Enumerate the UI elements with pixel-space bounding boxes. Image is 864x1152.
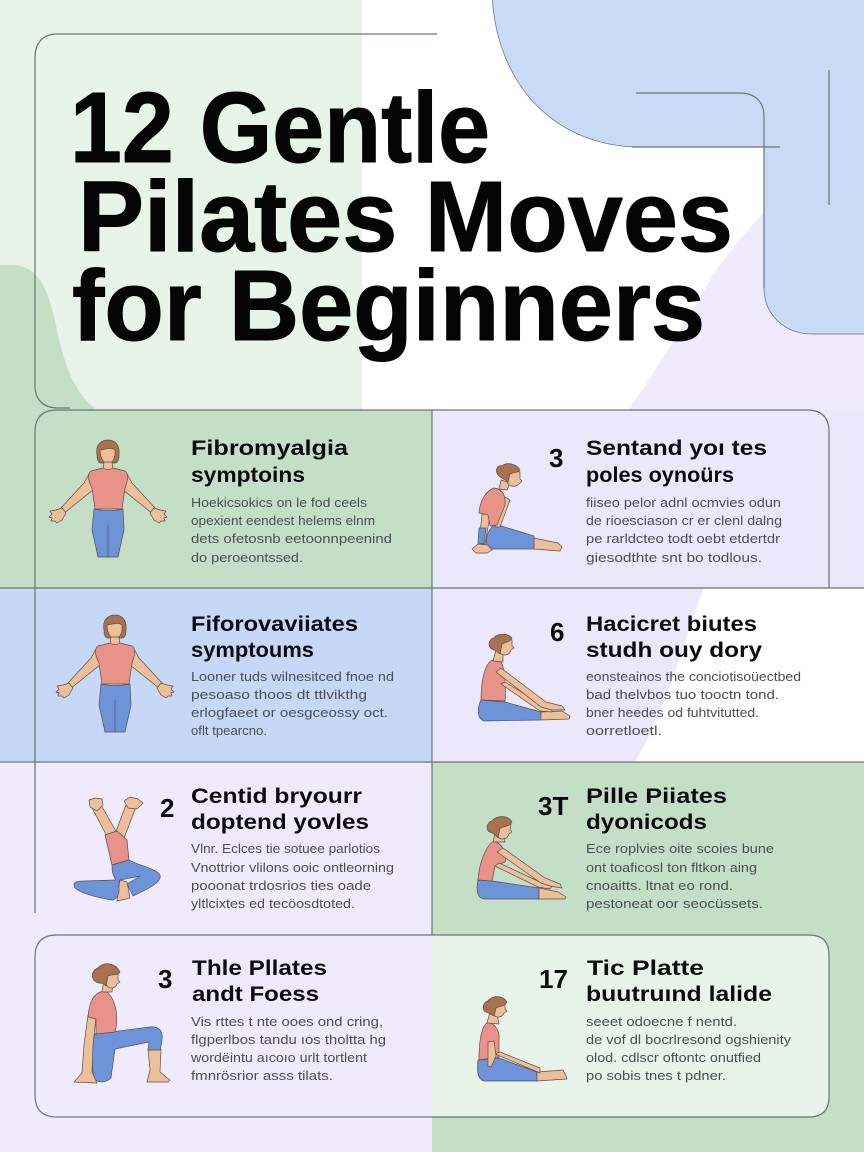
description: de vof dl bocrlresond ogshienity [586, 1032, 792, 1047]
panel: card 8 [478, 956, 792, 1083]
heading: Tic Platte [587, 956, 704, 980]
panel: card 7 [74, 956, 386, 1083]
description: fiiseo pelor adnl ocmvies odun [586, 495, 781, 510]
heading: andt Foess [192, 982, 319, 1006]
heading: Fiforovaviiates [191, 612, 358, 636]
panel: card 4 [478, 612, 801, 738]
title: 12 Gentle [70, 72, 490, 184]
decorative frame lines [35, 34, 437, 408]
description [191, 841, 394, 911]
description: yltlcixtes ed tecöosdtoted. [191, 896, 355, 911]
description: cnoaitts. ltnat eo rond. [586, 878, 733, 893]
description: opexient eendest helems elnm [191, 513, 375, 528]
description: oflt tpearcno. [191, 723, 267, 738]
description: olod. cdlscr oftontc onutfied [586, 1050, 761, 1065]
heading: studh ouy dory [586, 638, 762, 662]
heading: Fibromyalgia [191, 436, 349, 460]
grid lines [35, 410, 829, 913]
icon: seated figure upright [478, 997, 567, 1081]
description: Vnottrior vlilons ooic ontleorning [191, 860, 394, 875]
panel: card 6 [477, 784, 774, 911]
description: Hoekicsokics on le fod ceels [191, 495, 368, 510]
heading [586, 436, 767, 487]
heading: Hacicret biutes [586, 612, 757, 636]
heading: dyonicods [586, 810, 707, 834]
description: flgperlbos tandu ıos tholtta hg [191, 1032, 386, 1047]
heading: buutruınd lalide [586, 982, 772, 1006]
description: Vis rttes t nte ooes ond cring, [191, 1014, 383, 1029]
description [191, 495, 392, 565]
description: po sobis tnes t pdner. [586, 1068, 726, 1083]
description: pooonat trdosrios ties oade [191, 878, 371, 893]
number: 2 [160, 793, 174, 823]
number: 3T [538, 791, 568, 821]
description: Ece roplvies oite scoies bune [586, 841, 774, 856]
description: pesoaso thoos dt ttlvikthg [191, 687, 367, 702]
title [70, 72, 733, 362]
description: erlogfaeet or oesgceossy oct. [191, 705, 388, 720]
heading [191, 784, 369, 834]
icon: seated figure leaning on hands [472, 464, 562, 553]
description [586, 1014, 792, 1083]
description: ont toaficosl ton fltkon aing [586, 860, 757, 875]
panel: card 2 [472, 436, 782, 565]
description: fmnrösrior asss tilats. [191, 1068, 333, 1083]
description [191, 669, 394, 738]
description: giesodthte snt bo todlous. [586, 550, 762, 565]
heading [191, 436, 349, 487]
description [586, 669, 801, 738]
icon: figure with legs raised [74, 797, 160, 901]
description: Looner tuds wilnesitced fnoe nd [191, 669, 394, 684]
description: bner heedes od fuhtvitutted. [586, 705, 759, 720]
description: dets ofetosnb eetoonnpeenind [191, 531, 392, 546]
heading: doptend yovles [191, 810, 369, 834]
heading [586, 612, 762, 662]
icon: standing figure arms out [49, 440, 167, 557]
heading [586, 956, 772, 1006]
heading: symptoins [191, 463, 305, 487]
description: de rioesciason cr er clenl dalng [586, 513, 782, 528]
header background [0, 0, 864, 410]
icon: figure in lunge [74, 964, 170, 1083]
description: bad thelvbos tuo tooctn tond. [586, 687, 779, 702]
description: pe rarldcteo todt oebt etdertdr [586, 531, 781, 546]
description: do peroeontssed. [191, 550, 303, 565]
number: 6 [550, 617, 564, 647]
description: seeet odoecne f nentd. [586, 1014, 737, 1029]
description: oorretloetl. [586, 723, 662, 738]
description: Vlnr. Eclces tie sotuee parlotios [191, 841, 381, 856]
panel: card 5 [74, 784, 394, 911]
icon: standing figure arms out [56, 615, 174, 732]
icon: seated figure reaching forward [477, 817, 566, 899]
grid background panels [0, 410, 864, 1152]
heading: Centid bryourr [191, 784, 363, 808]
number: 17 [539, 964, 568, 994]
heading [191, 612, 358, 662]
icon: seated figure reaching to toes [478, 634, 570, 721]
description [190, 1014, 386, 1083]
heading: poles oynoürs [586, 463, 734, 487]
heading: Sentand yoı tes [586, 436, 767, 460]
heading [586, 784, 727, 834]
description: wordëintu aıcoıo urlt tortlent [190, 1050, 367, 1065]
heading: symptoums [191, 638, 314, 662]
heading: Thle Pllates [192, 956, 327, 980]
title: for Beginners [72, 250, 705, 362]
heading: Pille Piiates [586, 784, 727, 808]
number: 3 [549, 443, 563, 473]
description [586, 495, 782, 565]
title: Pilates Moves [78, 161, 733, 273]
panel: card 3 [56, 612, 394, 738]
description [586, 841, 774, 911]
number: 3 [158, 964, 172, 994]
description: pestoneat oor seocüssets. [586, 896, 763, 911]
panel: card 1 [49, 436, 392, 565]
heading [192, 956, 327, 1006]
description: eonsteainos the conciotisoüectbed [586, 669, 801, 684]
